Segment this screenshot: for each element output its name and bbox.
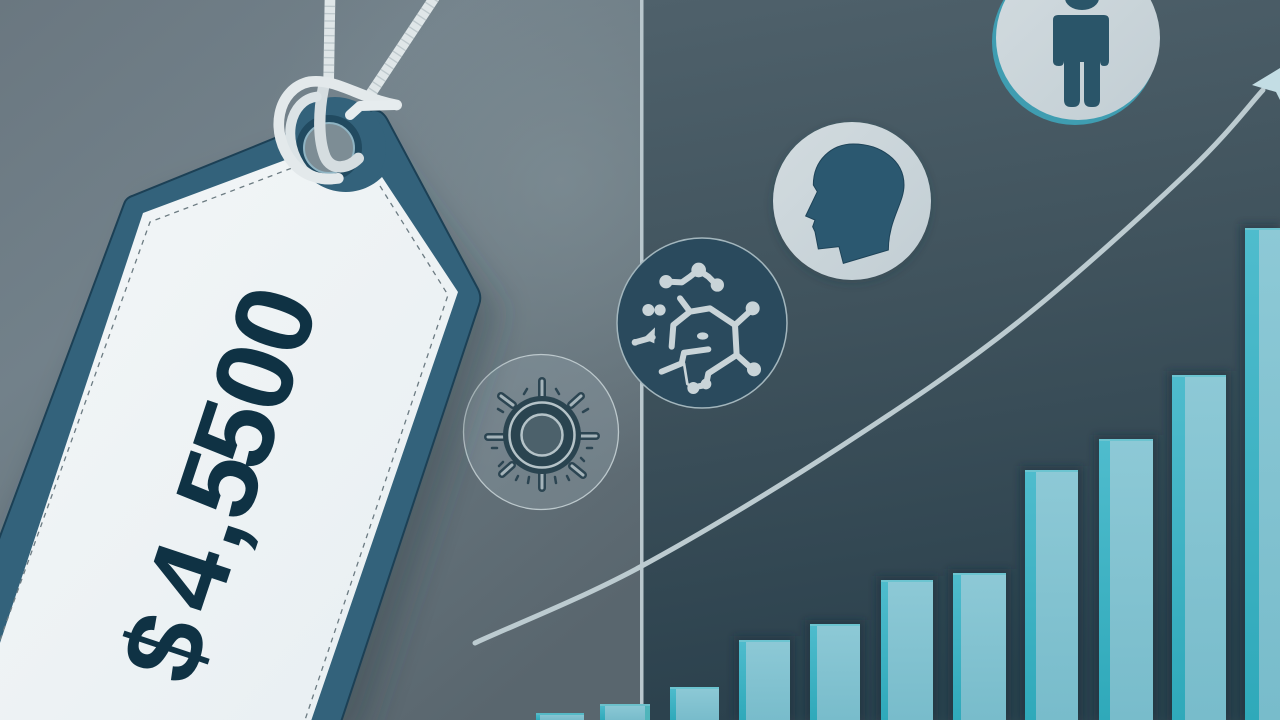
bar 10 (1172, 375, 1226, 720)
vertical divider line (640, 0, 644, 720)
bar 4 (739, 640, 790, 720)
bar 3 (670, 687, 719, 720)
bar 9 (1099, 439, 1153, 720)
tag body (0, 110, 480, 720)
icon: sun-like gear in translucent circle (464, 354, 618, 510)
bar 5 (810, 624, 860, 720)
arrowhead (1252, 68, 1280, 100)
tag eyelet (296, 115, 362, 181)
rope knot (279, 0, 434, 179)
bar 7 (953, 573, 1006, 720)
price text: $4,5500 (97, 272, 342, 696)
tag paper face (0, 156, 458, 720)
bar shadows (734, 224, 1280, 720)
tag collar around eyelet (284, 97, 386, 199)
icon: person silhouette on disc (992, 0, 1160, 125)
bar 11 (1245, 228, 1280, 720)
panel: left grey background (0, 0, 642, 720)
panel: right dark background (642, 0, 1280, 720)
bar 8 (1025, 470, 1078, 720)
icon: head silhouette on disc (773, 122, 931, 283)
bar 6 (881, 580, 933, 720)
bar 2 (600, 704, 650, 720)
bar chart: rising costs (536, 224, 1280, 720)
tag stitching (0, 168, 448, 720)
tag shadow (0, 130, 500, 720)
price tag (0, 0, 500, 720)
icon: neural network in dark circle (617, 238, 787, 408)
arrow: rising trend curve (475, 68, 1280, 643)
bar 1 (536, 713, 584, 720)
